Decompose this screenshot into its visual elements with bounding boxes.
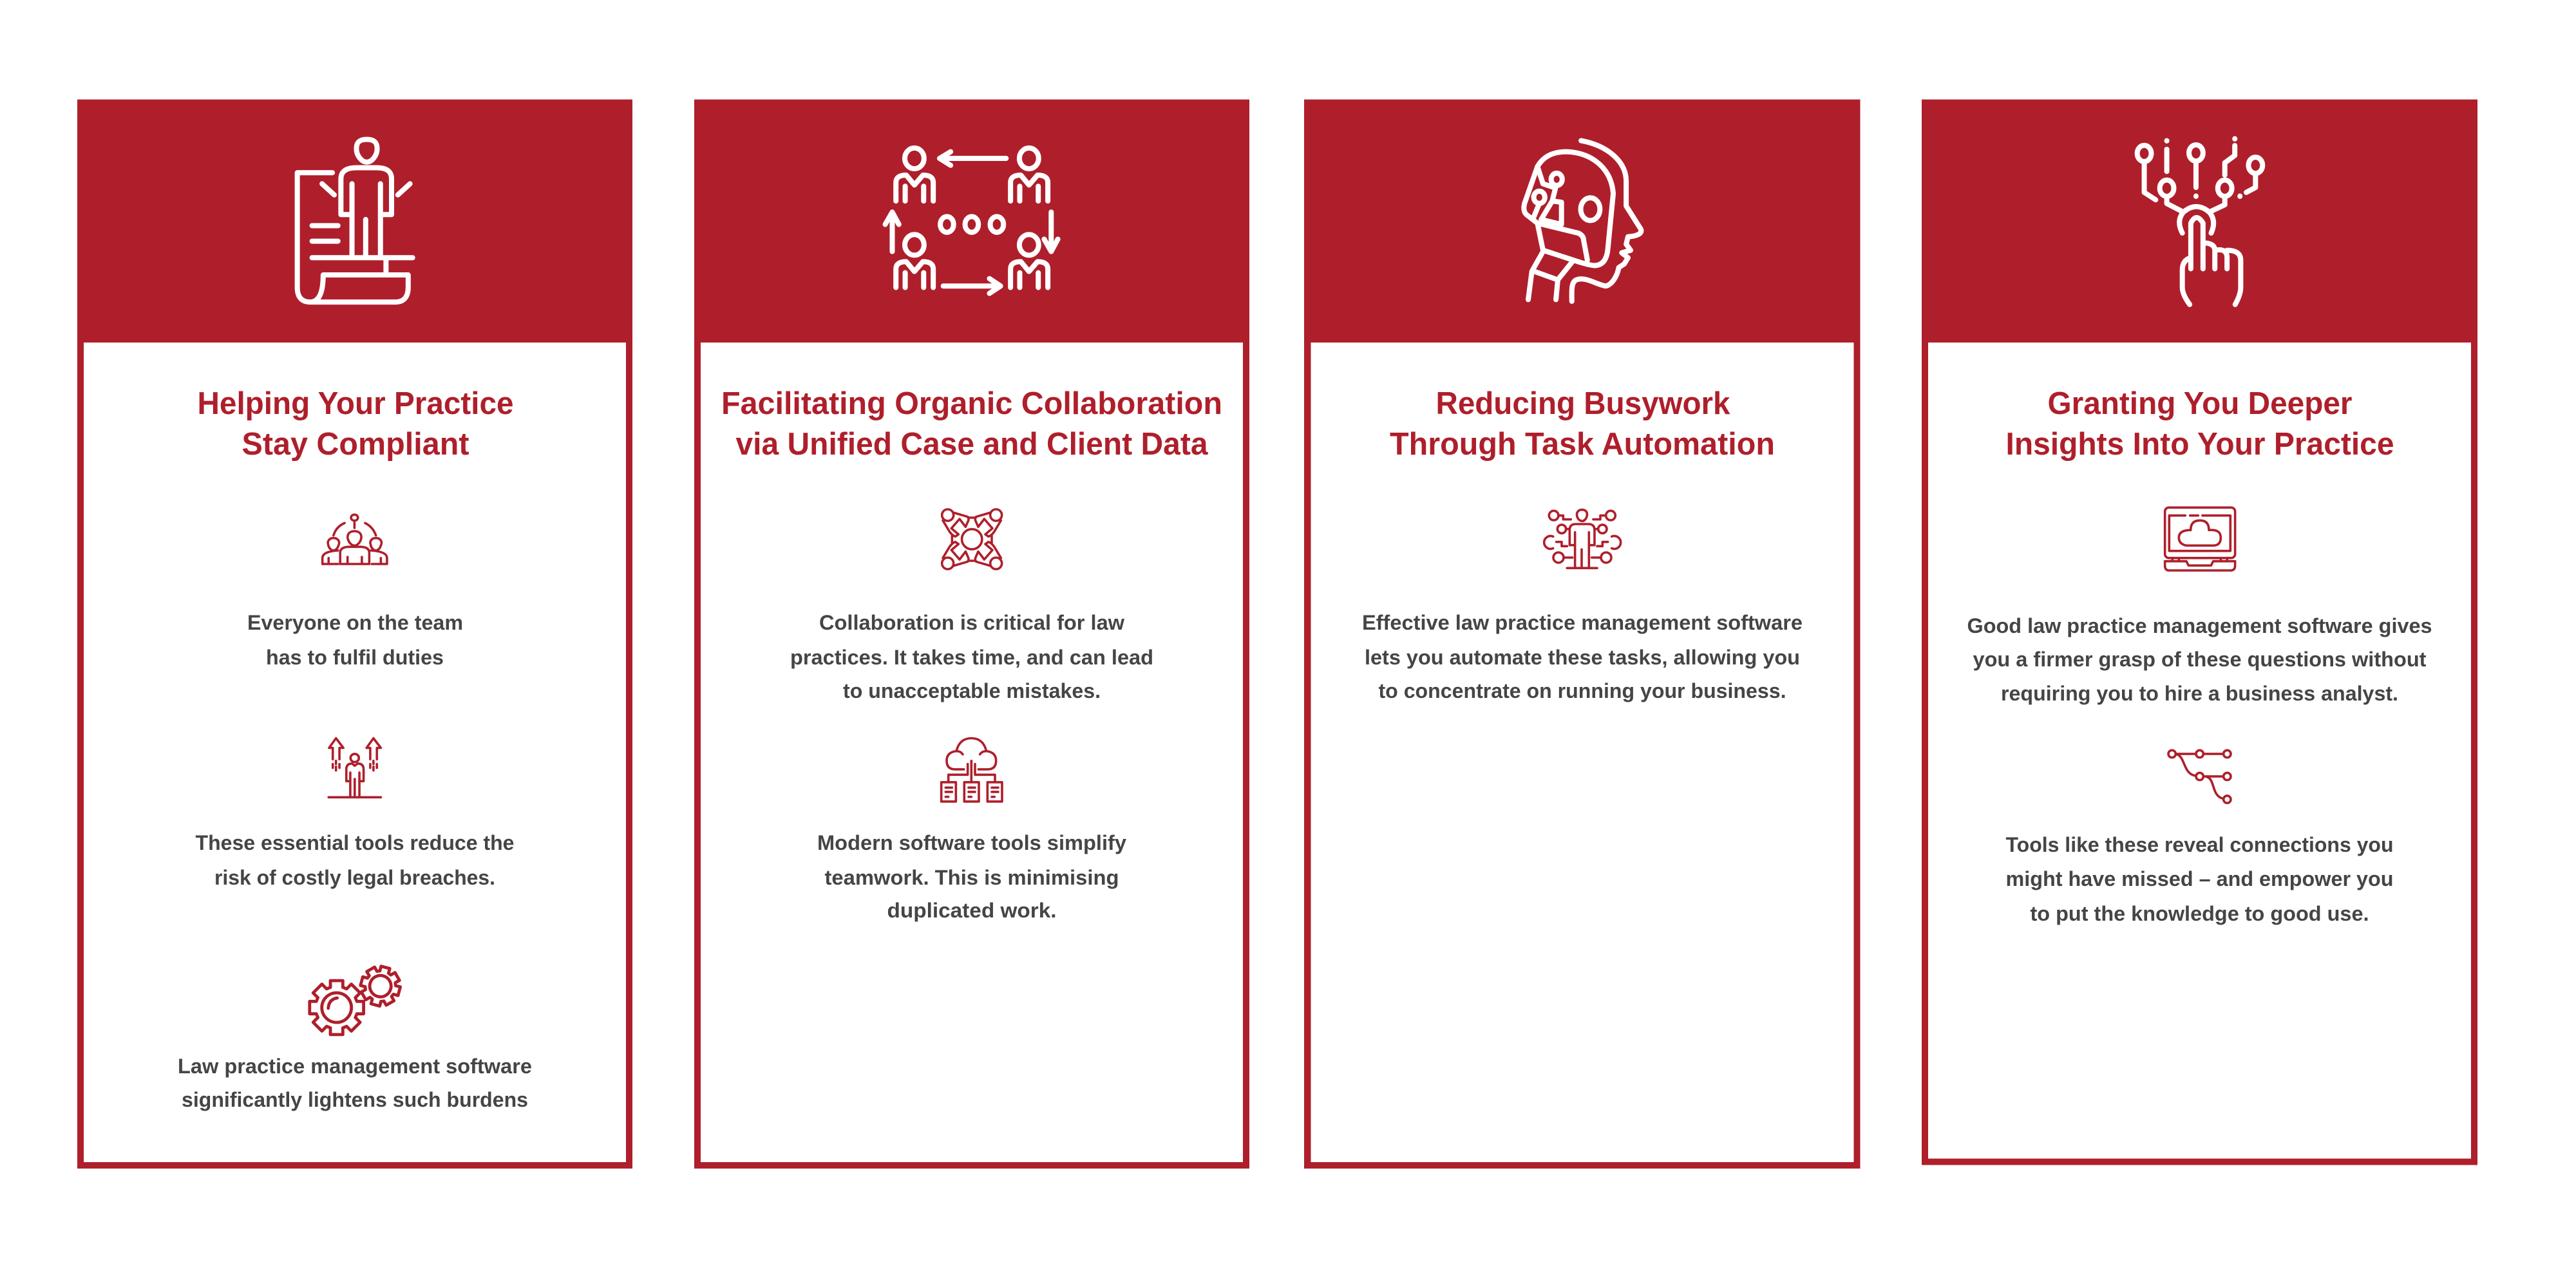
text: tools reveal connections: to put the knowledge to good use. — [2030, 902, 2369, 925]
text: effective software: lets you automate these tasks, allowing you — [1365, 646, 1800, 669]
text: tools reveal connections: might have missed – and empower you — [2005, 867, 2393, 890]
text: essential tools: risk of costly legal breaches. — [214, 866, 495, 889]
text: everyone on the team: has to fulfil duties — [266, 646, 444, 669]
card frame and red header — [694, 99, 1249, 1169]
text: good software: Good law practice management software gives — [1967, 614, 2432, 637]
heading — [1390, 386, 1775, 462]
heading: Reducing Busywork — [1436, 386, 1730, 421]
icon: robot head — [1524, 140, 1641, 301]
panel: facilitating organic collaboration — [694, 99, 1249, 1169]
heading: Helping Your Practice — [197, 386, 514, 421]
text: law practice management software: Law practice management software — [178, 1055, 532, 1078]
text: good software: requiring you to hire a business analyst. — [2001, 682, 2398, 705]
icon: four people exchanging — [886, 148, 1058, 294]
icon: collaboration circle — [942, 509, 1002, 569]
text: law practice management software — [178, 1055, 532, 1111]
text: tools reveal connections — [2005, 833, 2393, 925]
heading: Insights Into Your Practice — [2005, 427, 2394, 462]
text: everyone on the team — [247, 611, 463, 669]
text: collaboration is critical: to unacceptable mistakes. — [843, 679, 1101, 702]
card frame and red header — [77, 99, 632, 1169]
text: collaboration is critical — [790, 611, 1153, 702]
panel: reducing busywork — [1304, 99, 1860, 1169]
icon: team — [323, 514, 387, 564]
text: everyone on the team: Everyone on the team — [247, 611, 463, 634]
text: collaboration is critical: Collaboration is critical for law — [819, 611, 1124, 634]
text: effective software: Effective law practice management software — [1362, 611, 1803, 634]
text: modern software tools — [817, 831, 1126, 922]
text: effective software: to concentrate on running your business. — [1378, 679, 1786, 702]
card frame and red header — [1922, 99, 2477, 1165]
icon: person with circuit nodes — [1544, 510, 1621, 568]
text: modern software tools: Modern software tools simplify — [817, 831, 1126, 854]
heading: Stay Compliant — [242, 427, 469, 462]
text: collaboration is critical: practices. It takes time, and can lead — [790, 646, 1153, 669]
icon: finger touching circuit — [2137, 138, 2262, 305]
text: effective software — [1362, 611, 1803, 702]
card frame and red header — [1304, 99, 1860, 1169]
text: good software: you a firmer grasp of these questions without — [1973, 648, 2427, 671]
text: essential tools — [196, 831, 514, 889]
text: law practice management software: significantly lightens such burdens — [182, 1088, 528, 1111]
text: modern software tools: duplicated work. — [887, 899, 1056, 922]
icon: cloud with documents — [942, 738, 1002, 802]
heading: Facilitating Organic Collaboration — [721, 386, 1222, 421]
heading: via Unified Case and Client Data — [735, 427, 1208, 462]
icon: person on document — [298, 140, 413, 302]
text: essential tools: These essential tools reduce the — [196, 831, 514, 854]
icon: branching nodes — [2168, 750, 2231, 803]
panel: granting deeper insights — [1922, 99, 2477, 1165]
heading — [721, 386, 1222, 462]
heading — [197, 386, 514, 462]
text: tools reveal connections: Tools like these reveal connections you — [2005, 833, 2393, 856]
icon: person with up arrows — [328, 738, 381, 797]
text: good software — [1967, 614, 2432, 705]
icon: gears — [310, 963, 404, 1035]
heading: Through Task Automation — [1390, 427, 1775, 462]
icon: laptop with cloud — [2165, 507, 2235, 570]
heading — [2005, 386, 2394, 462]
text: modern software tools: teamwork. This is minimising — [824, 866, 1119, 889]
heading: Granting You Deeper — [2048, 386, 2352, 421]
panel: helping your practice stay compliant — [77, 99, 632, 1169]
